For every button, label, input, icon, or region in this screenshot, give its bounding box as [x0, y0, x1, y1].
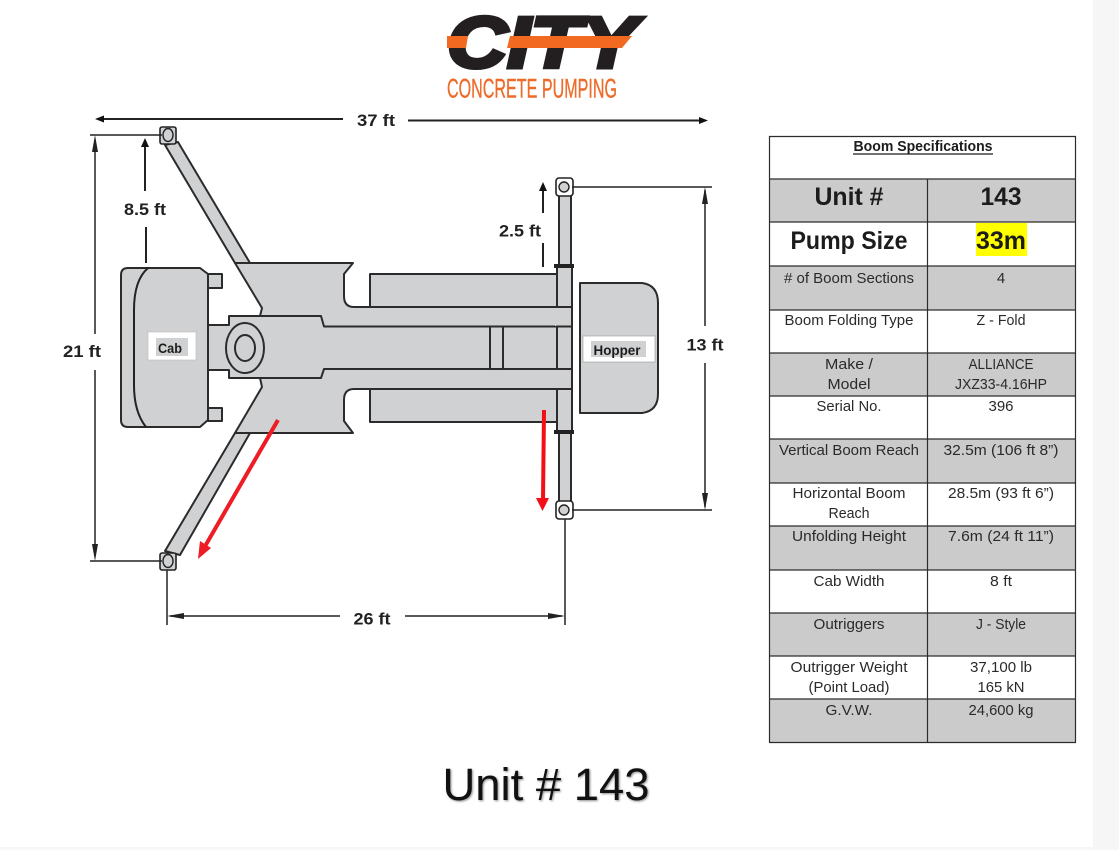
dimension: 2.5 ft: 2.5 ft [499, 222, 541, 240]
row: unfolding height: Unfolding Height [792, 528, 907, 545]
red arrow: left outrigger [198, 420, 278, 559]
cab [121, 268, 222, 427]
upper left pad [160, 127, 176, 144]
lower left outrigger leg [165, 433, 250, 555]
row: make and model: JXZ33-4.16HP [955, 376, 1047, 393]
dimension: 13 ft [572, 187, 724, 510]
table title: Boom Specifications [854, 139, 992, 155]
logo wordmark: CITY [447, 4, 644, 84]
row: gross vehicle weight: G.V.W. [826, 702, 872, 719]
dimension: 8.5 ft: 8.5 ft [124, 200, 166, 219]
row: outriggers [814, 616, 1026, 633]
red arrow: rear outrigger [536, 410, 549, 511]
dimension: 8.5 ft [124, 138, 166, 263]
row: horizontal reach [792, 485, 1054, 522]
bottom title: Unit # 143 [442, 759, 650, 810]
hopper label: Hopper [594, 343, 641, 358]
dimension: 21 ft [63, 135, 162, 561]
cross member [490, 326, 503, 369]
row: outrigger weight [790, 659, 1032, 696]
row: unfolding height: 7.6m (24 ft 11”) [948, 528, 1054, 545]
dimension: 26 ft: 26 ft [354, 610, 391, 628]
row: gross vehicle weight [826, 702, 1034, 719]
cab label: Cab [158, 341, 182, 356]
chassis wings [235, 263, 558, 433]
row: vertical reach: 32.5m (106 ft 8”) [944, 442, 1058, 459]
row: pump size: 33m [976, 227, 1026, 255]
row: unit number [814, 183, 1022, 211]
rear outrigger beam [554, 266, 574, 432]
centre section [208, 316, 558, 378]
row: unit number: Unit # [814, 183, 884, 211]
row: make and model: Model [828, 376, 870, 393]
row: outrigger weight: 165 kN [978, 679, 1024, 696]
row: pump size: Pump Size [790, 227, 908, 255]
cab label [148, 332, 196, 360]
rear top pad [556, 178, 573, 196]
row: folding type: Z - Fold [976, 312, 1026, 329]
side boxes [370, 274, 558, 422]
row: vertical reach: Vertical Boom Reach [779, 442, 919, 459]
row: pump size [790, 223, 1027, 256]
dimension: 21 ft: 21 ft [63, 342, 101, 361]
row: cab width [814, 573, 1013, 590]
row: cab width: Cab Width [814, 573, 884, 590]
truck plan diagram [121, 127, 658, 570]
hopper label [583, 336, 655, 362]
row: serial number [816, 398, 1014, 415]
row: make and model [825, 356, 1047, 393]
boom specifications table [769, 136, 1076, 742]
logo tagline: CONCRETE PUMPING [447, 74, 617, 104]
dimension: 13 ft: 13 ft [686, 336, 724, 354]
row: outriggers: Outriggers [814, 616, 884, 633]
row: unit number: 143 [980, 183, 1022, 211]
logo orange stripe [447, 36, 632, 48]
row: boom sections: 4 [997, 270, 1005, 287]
row: serial number: Serial No. [816, 398, 882, 415]
row: make and model: Make / [825, 356, 874, 373]
row: horizontal reach: Reach [828, 505, 870, 522]
row: folding type [784, 312, 1026, 329]
row: boom sections [784, 270, 1005, 287]
row: outrigger weight: 37,100 lb [970, 659, 1032, 676]
table grid [769, 136, 1076, 742]
row: folding type: Boom Folding Type [784, 312, 914, 329]
lower left pad [160, 553, 176, 570]
row: outriggers: J - Style [976, 616, 1026, 633]
turret ring [226, 323, 264, 373]
row: make and model: ALLIANCE [968, 356, 1034, 373]
dimension: 26 ft [167, 519, 565, 628]
dimension: 2.5 ft [499, 182, 547, 267]
dimension: 37 ft [95, 111, 708, 130]
row: outrigger weight: (Point Load) [808, 679, 890, 696]
row: cab width: 8 ft [990, 573, 1013, 590]
rear bottom pad [556, 501, 573, 519]
row: horizontal reach: Horizontal Boom [792, 485, 906, 502]
rear outrigger leg [559, 190, 571, 505]
hopper [580, 283, 658, 413]
upper left outrigger leg [165, 142, 250, 263]
row: vertical reach [779, 442, 1058, 459]
row: horizontal reach: 28.5m (93 ft 6”) [948, 485, 1054, 502]
row: unfolding height [792, 528, 1054, 545]
table row shading [769, 179, 1076, 742]
row: outrigger weight: Outrigger Weight [790, 659, 908, 676]
row: gross vehicle weight: 24,600 kg [968, 702, 1034, 719]
logo: City Concrete Pumping [447, 4, 644, 104]
row: serial number: 396 [988, 398, 1014, 415]
dimension: 37 ft: 37 ft [357, 111, 395, 130]
row: boom sections: # of Boom Sections [784, 270, 914, 287]
